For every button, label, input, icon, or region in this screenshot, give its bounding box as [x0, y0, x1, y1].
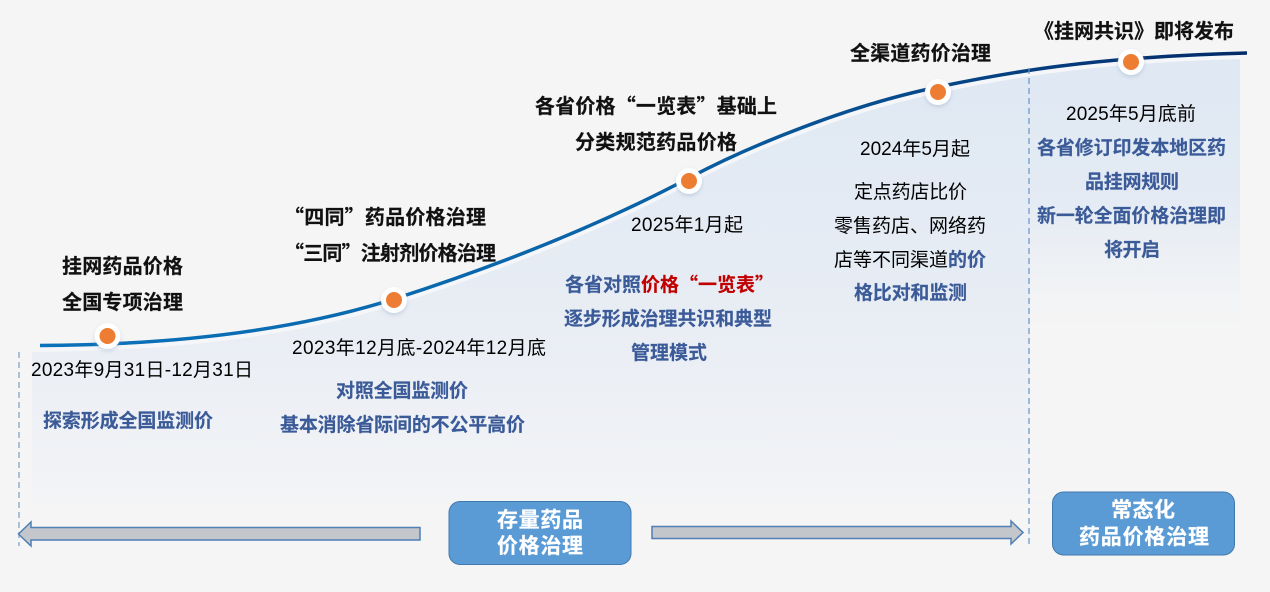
- stage 3 text: 逐步形成治理共识和典型: [564, 307, 772, 330]
- left arrow: [18, 522, 420, 546]
- stage 4 text: 全渠道药价治理: [850, 41, 991, 65]
- stage 3 text: [535, 90, 777, 364]
- right arrow: [652, 521, 1023, 544]
- stage 3 text: 2025年1月起: [631, 214, 743, 236]
- stage 1 text: 全国专项治理: [62, 290, 183, 314]
- label box: existing drug price governance: 价格治理: [497, 535, 583, 558]
- stage 5 text: 各省修订印发本地区药: [1037, 136, 1226, 159]
- area under the curve: [32, 59, 1240, 504]
- area fade block on the right: [1030, 330, 1242, 502]
- label box: normalized drug price governance: 常态化: [1111, 498, 1175, 522]
- divider: left dashed line: [18, 352, 20, 546]
- stage 1 text: [31, 255, 253, 432]
- stage 4 text: [834, 41, 991, 304]
- label box: existing drug price governance: 存量药品: [497, 509, 583, 532]
- stage 2 text: 基本消除省际间的不公平高价: [280, 413, 525, 436]
- stage 4 text: 定点药店比价: [854, 181, 967, 203]
- stage 5 text: [1034, 15, 1234, 261]
- stage 1 text: 探索形成全国监测价: [43, 409, 213, 432]
- milestone dot 2: [381, 287, 407, 313]
- stage 5 text: 品挂网规则: [1085, 171, 1179, 193]
- stage 2 text: [280, 201, 546, 436]
- stage 1 text: 2023年9月31日-12月31日: [31, 359, 253, 381]
- milestone dot 5: [1118, 49, 1144, 75]
- milestone dot 3: [676, 168, 702, 194]
- stage 5 text: 2025年5月底前: [1066, 103, 1196, 125]
- divider: right dashed line: [1028, 68, 1030, 544]
- stage 5 text: 新一轮全面价格治理即: [1037, 204, 1226, 227]
- stage 4 text: 店等不同渠道的价: [834, 249, 986, 271]
- stage 4 text: 格比对和监测: [854, 282, 967, 304]
- stage 1 text: 挂网药品价格: [62, 255, 183, 278]
- stage 5 text: 《挂网共识》即将发布: [1034, 15, 1234, 44]
- milestone dot 4: [925, 79, 951, 105]
- stage 4 text: 2024年5月起: [860, 138, 970, 160]
- stage 4 text: 零售药店、网络药: [834, 215, 986, 237]
- milestone dot 1: [94, 323, 120, 349]
- stage 2 text: 2023年12月底-2024年12月底: [292, 337, 546, 359]
- stage 5 text: 将开启: [1104, 239, 1160, 261]
- stage 2 text: “三同”注射剂价格治理: [284, 237, 496, 266]
- stage 3 text: 管理模式: [631, 341, 707, 364]
- stage 2 text: 对照全国监测价: [336, 379, 468, 402]
- stage 3 text: 分类规范药品价格: [575, 131, 737, 154]
- label box: normalized drug price governance: [1052, 492, 1234, 555]
- stage 3 text: 各省对照价格“一览表”: [565, 270, 774, 297]
- curve line: [40, 53, 1247, 346]
- stage 2 text: “四同”药品价格治理: [284, 201, 486, 230]
- stage 3 text: 各省价格“一览表”基础上: [535, 90, 777, 119]
- area fade on the right: [1030, 200, 1242, 330]
- label box: existing drug price governance: [449, 502, 631, 564]
- curve glow: [40, 56, 1240, 349]
- label box: normalized drug price governance: 药品价格治理: [1079, 526, 1209, 549]
